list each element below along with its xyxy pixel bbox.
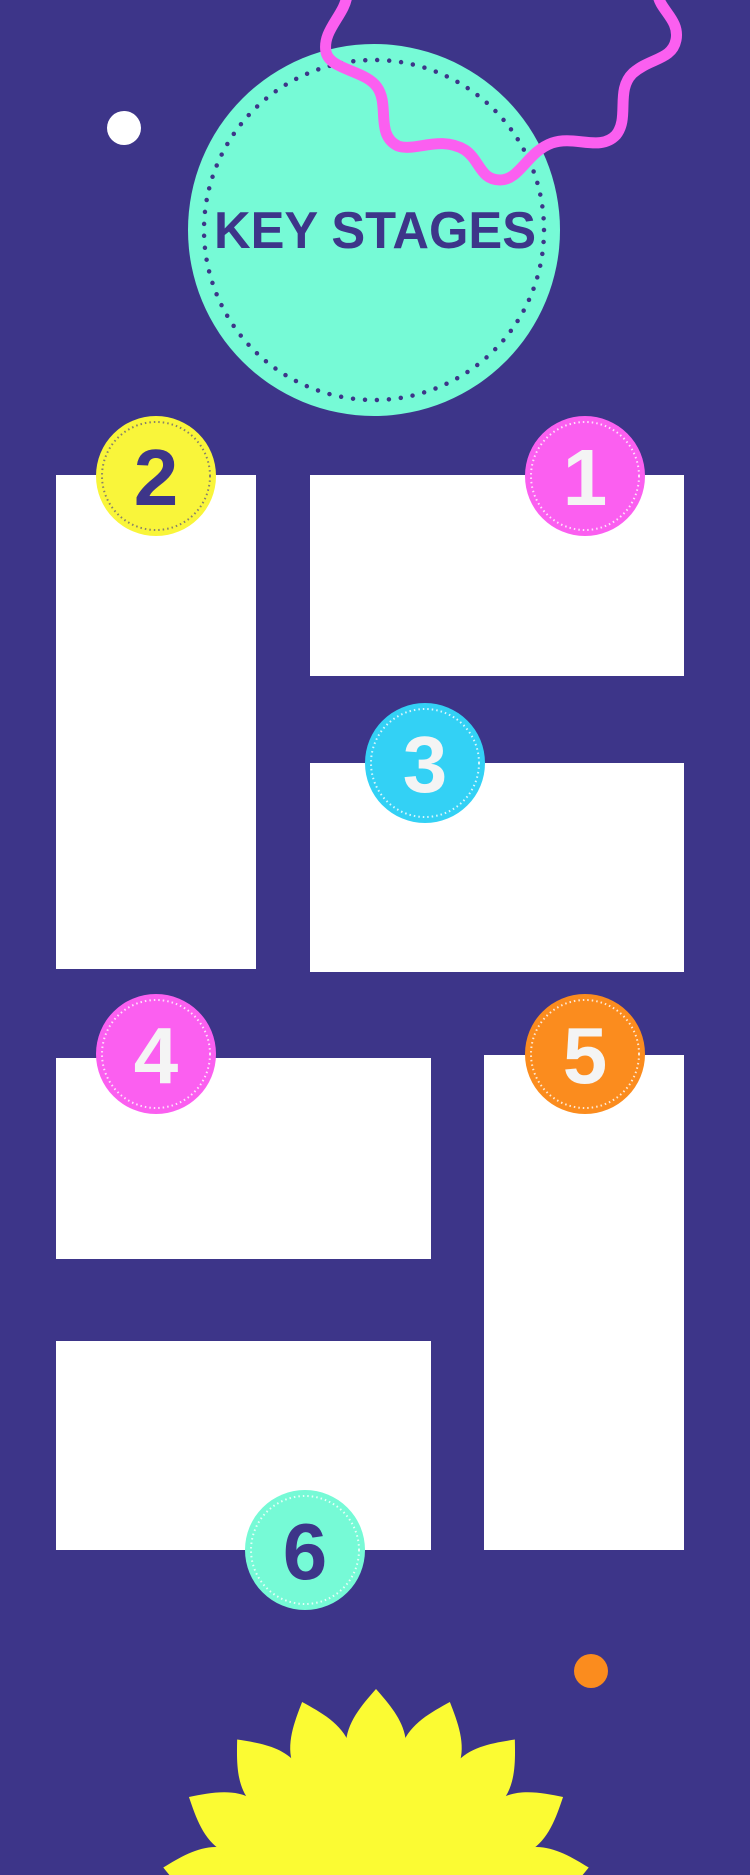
- badge 4: [96, 994, 216, 1114]
- badge 4: 4: [134, 1011, 179, 1100]
- panel 2: [56, 475, 256, 969]
- panel 4: [56, 1058, 431, 1259]
- badge 2: 2: [134, 433, 178, 522]
- title: KEY STAGES: [214, 202, 536, 260]
- sun: [158, 1689, 594, 1875]
- panel 3: [310, 763, 684, 972]
- orange dot: [574, 1654, 608, 1688]
- title circle: [188, 44, 560, 416]
- badge 5: [525, 994, 645, 1114]
- badge 1: 1: [563, 433, 607, 522]
- pink wave: [326, 0, 677, 180]
- badge 5: 5: [563, 1011, 607, 1100]
- panel 1: [310, 475, 684, 676]
- white dot: [107, 111, 141, 145]
- badge 1: [525, 416, 645, 536]
- panel 6: [56, 1341, 431, 1550]
- badge 3: 3: [403, 720, 447, 809]
- badge 3: [365, 703, 485, 823]
- badge 6: [245, 1490, 365, 1610]
- badge 6: 6: [283, 1507, 327, 1596]
- badge 2: [96, 416, 216, 536]
- panel 5: [484, 1055, 684, 1550]
